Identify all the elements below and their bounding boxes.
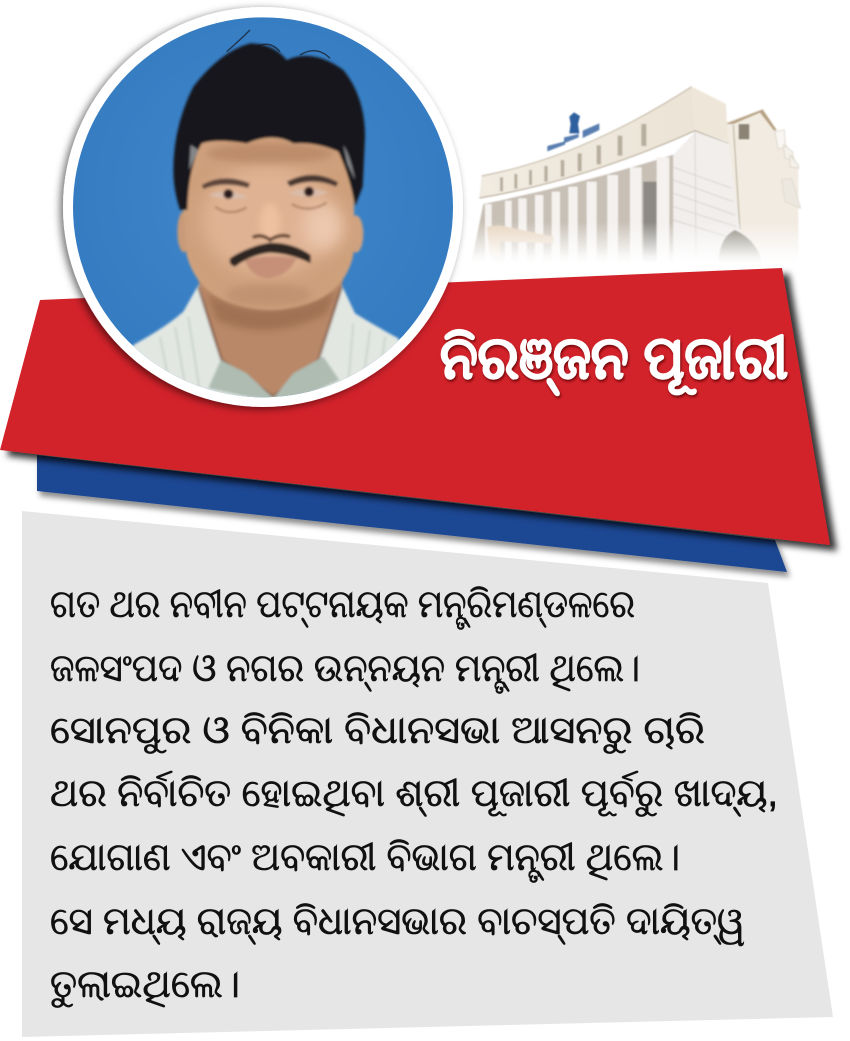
portrait: circular photo [60, 7, 463, 410]
neck [197, 278, 344, 397]
text block: biography: ଗତ ଥର ନବୀନ ପଟ୍ଟନାୟକ ମନ୍ତ୍ରିମଣ୍ଡଳରେ [50, 583, 635, 630]
stray hair strands [227, 30, 330, 58]
text block: biography: ଥର ନିର୍ବାଚିତ ହୋଇଥିବା ଶ୍ରୀ ପୂଜାରୀ ପୂର୍ବରୁ ଖାଦ୍ୟ, [50, 770, 778, 818]
red name banner [0, 268, 830, 545]
blue ribbon band [37, 455, 787, 572]
eyebrows [202, 178, 250, 189]
text block: biography [50, 583, 778, 1009]
moustache [230, 243, 311, 267]
nose [253, 236, 290, 240]
ears [177, 211, 191, 252]
face [184, 130, 354, 310]
bottom fade to white [463, 222, 807, 265]
hair [173, 43, 365, 210]
assembly emblem and sign [547, 112, 599, 151]
text block: biography: ଜଳସଂପଦ ଓ ନଗର ଉନ୍ନୟନ ମନ୍ତ୍ରୀ ଥିଲେ। [50, 647, 640, 694]
text block: biography: ସେ ମଧ୍ୟ ରାଜ୍ୟ ବିଧାନସଭାର ବାଚସ୍ପତି ଦାୟିତ୍ୱ [50, 900, 745, 945]
eyes [208, 187, 328, 212]
shirt [132, 284, 400, 398]
portrait photograph [60, 10, 460, 410]
text block: biography: ତୁଲାଇଥିଲେ। [50, 963, 240, 1009]
white circular frame [63, 7, 463, 407]
heading: name: ନିରଞ୍ଜନ ପୂଜାରୀ [440, 324, 788, 396]
image: assembly building [463, 87, 807, 265]
person [132, 42, 400, 398]
shirt collar [208, 357, 339, 401]
text block: biography: ସୋନପୁର ଓ ବିନିକା ବିଧାନସଭା ଆସନରୁ ଚାରି [50, 709, 705, 755]
text block: biography: ଯୋଗାଣ ଏବଂ ଅବକାରୀ ବିଭାଗ ମନ୍ତ୍ରୀ ଥିଲେ। [50, 836, 680, 883]
building facade [472, 87, 801, 262]
lips [245, 256, 297, 278]
panel: gray biography background [22, 511, 833, 1037]
